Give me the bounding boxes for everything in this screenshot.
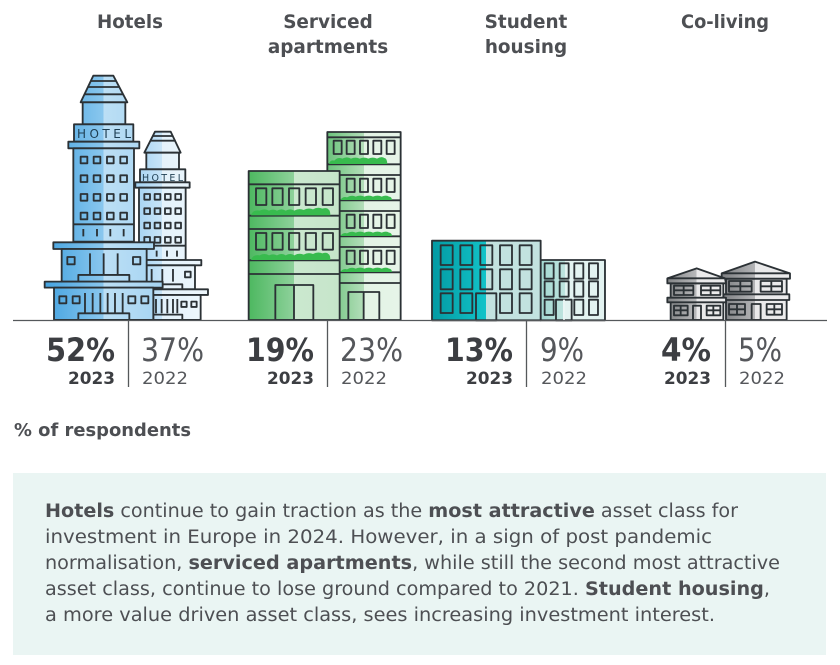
panel: commentary: asset class, continue to lose ground compared to 2021. Student housing , [45,579,770,600]
stat: Student housing: 13% [445,331,513,369]
axis baseline and dividers [13,320,827,387]
hotel sign small: HOTEL [142,173,184,184]
stat: Hotels: 37% [141,331,204,369]
heading: Serviced apartments: apartments [268,37,388,58]
illustration: serviced apartment buildings [249,132,401,320]
heading: Serviced apartments: Serviced [283,12,373,33]
stat: Student housing: 9% [540,331,584,369]
illustration: co-living houses [667,262,790,320]
panel: commentary: investment in Europe in 2024. However, in a sign of post pandemic [45,527,712,548]
stat: Co-living: 4% [661,331,711,369]
stat: Student housing: 2023 [466,369,513,389]
stat: Co-living: 2023 [664,369,711,389]
illustration: hotel buildings [45,76,208,320]
heading: Student housing: Student [485,12,568,33]
hotel sign large: HOTEL [77,127,131,141]
stat: Serviced apartments: 23% [340,331,403,369]
panel: commentary: normalisation, serviced apartments , while still the second most attractive [45,553,780,574]
heading: Co-living: Co-living [681,12,769,33]
stat: Student housing: 2022 [541,369,587,389]
stat: Serviced apartments: 19% [246,331,314,369]
heading: Hotels: Hotels [97,12,163,33]
heading: Student housing: housing [485,37,567,58]
note: % of respondents: % of respondents [14,421,191,441]
stat: Co-living: 5% [738,331,782,369]
stat: Serviced apartments: 2023 [267,369,314,389]
panel: commentary: a more value driven asset class, sees increasing investment interest. [45,605,715,626]
illustration: student housing buildings [432,241,605,320]
stat: Co-living [661,331,785,389]
stat: Serviced apartments [246,331,403,389]
stat: Hotels [46,331,204,389]
stat: Student housing [445,331,587,389]
stat: Hotels: 2023 [68,369,115,389]
stat: Hotels: 2022 [142,369,188,389]
stat: Serviced apartments: 2022 [341,369,387,389]
stat: Hotels: 52% [46,331,115,369]
stat: Co-living: 2022 [739,369,785,389]
panel: commentary: Hotels continue to gain traction as the most attractive asset class for [45,501,738,522]
panel: commentary [13,473,826,655]
